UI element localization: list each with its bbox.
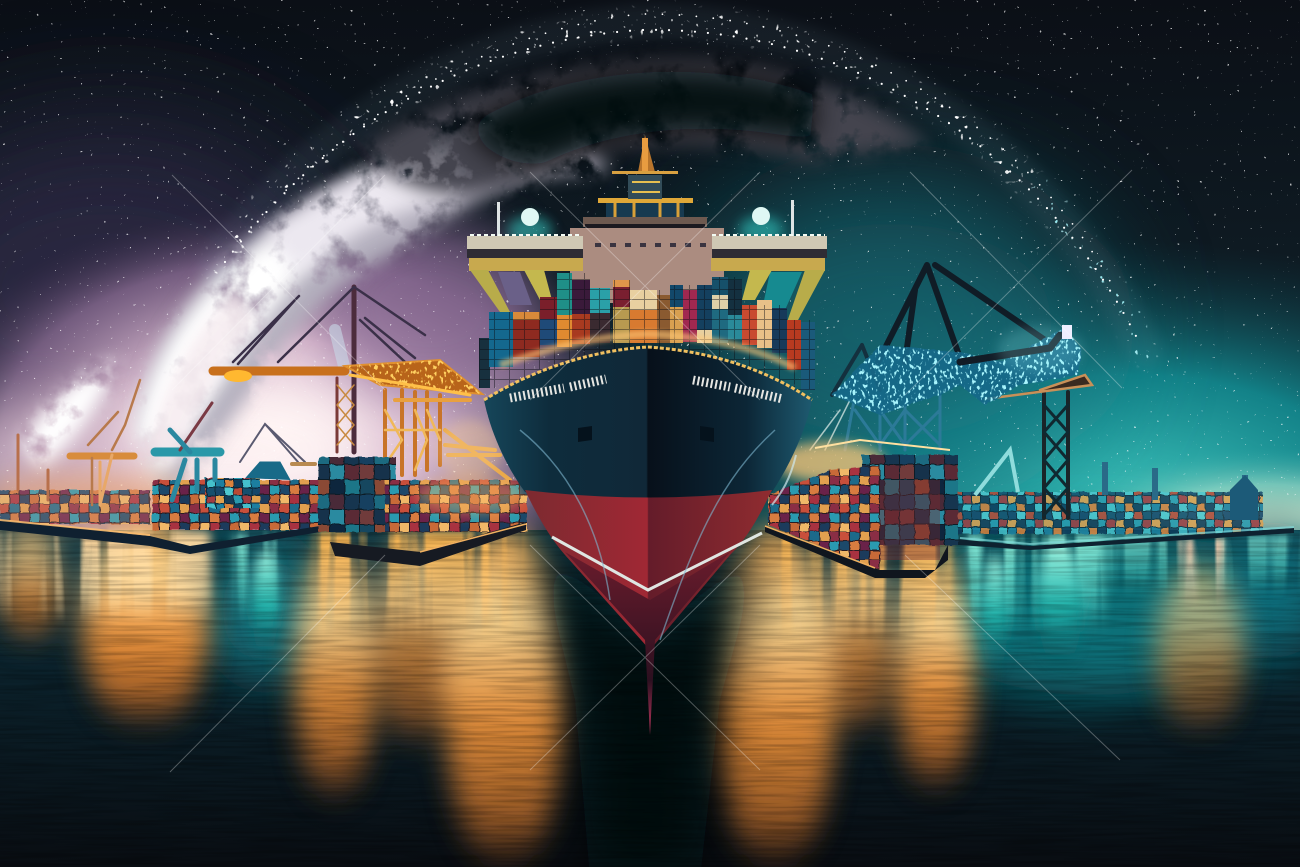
container ship — [467, 135, 827, 735]
star arc — [215, 14, 1145, 350]
ship hull — [484, 347, 812, 735]
orange crane far left — [18, 380, 140, 505]
teal crane — [155, 403, 220, 500]
lattice tower — [1044, 392, 1068, 518]
container lines and lit base — [479, 273, 815, 390]
left orange crane — [213, 287, 510, 480]
orange soft glow — [0, 520, 1244, 867]
background stars — [0, 0, 1300, 500]
grey crane — [240, 424, 315, 480]
stacks centre — [613, 280, 630, 307]
lattice under deck — [845, 390, 940, 450]
teal water glow — [205, 520, 1300, 695]
right shore port — [945, 450, 1294, 550]
stacks right — [683, 290, 697, 342]
water with reflections — [0, 520, 1300, 867]
ship bridge deck — [467, 217, 827, 322]
ship container stacks — [479, 273, 815, 390]
watermark diagonal lines — [170, 170, 1132, 772]
stacks left — [479, 338, 490, 388]
vertical light streaks — [0, 532, 1300, 642]
moon and galaxy cloud arc — [22, 60, 930, 500]
small left cranes — [18, 380, 315, 505]
water ripple texture — [0, 530, 1300, 867]
left shore port — [0, 474, 320, 554]
right container stacks — [765, 440, 958, 578]
ship shadow on water — [535, 535, 765, 867]
glittering crane deck — [832, 328, 1082, 415]
ship mast tower — [497, 135, 794, 238]
ship lights (two moons) — [508, 207, 783, 244]
left container stacks — [318, 457, 527, 566]
teal reflections — [252, 540, 1082, 675]
right teal crane — [810, 265, 1092, 518]
